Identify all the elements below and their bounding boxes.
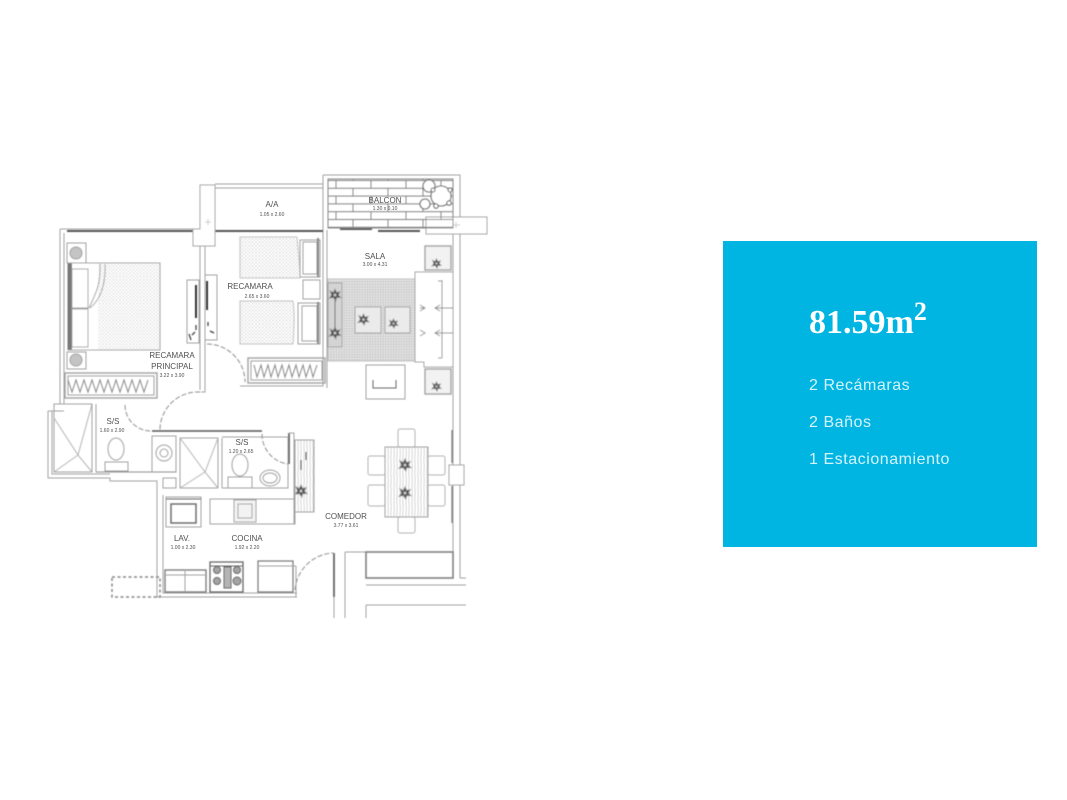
- toilet: [105, 438, 128, 471]
- label: balcon: 1.30 x 0.10: [373, 206, 398, 212]
- shower: [54, 404, 96, 472]
- laundry cabinets: [165, 570, 206, 592]
- stove: [210, 562, 243, 592]
- icon: potted plants: [420, 180, 452, 209]
- label: recamara: RECAMARA: [227, 282, 273, 291]
- structural columns: [193, 185, 487, 485]
- label: balcon: [369, 196, 402, 212]
- night table: [303, 280, 320, 299]
- kitchen and laundry: [112, 497, 296, 597]
- vent: [112, 577, 160, 597]
- label: sala: SALA: [365, 252, 386, 261]
- dark window walls: [67, 229, 452, 597]
- label: cocina: 1.92 x 2.20: [235, 545, 260, 551]
- label: s/s left: S/S: [107, 417, 119, 426]
- label: recamara principal: 3.22 x 3.90: [160, 373, 185, 379]
- balcony: [328, 179, 453, 228]
- master bedroom furniture: [65, 243, 217, 398]
- label: recamara: 2.65 x 3.60: [245, 294, 270, 300]
- label: lav: [171, 534, 196, 551]
- washer: [166, 497, 201, 527]
- door swings: [125, 344, 333, 590]
- label: comedor: [325, 512, 367, 529]
- closet with hangers: [65, 373, 157, 398]
- label: recamara principal: [149, 351, 195, 379]
- label: s/s right: 1.20 x 2.65: [229, 449, 254, 455]
- label: sala: [363, 252, 388, 268]
- label: cocina: [231, 534, 263, 551]
- counter with sink: [210, 499, 295, 524]
- label: s/s left: [100, 417, 125, 434]
- second bedroom furniture: [240, 237, 325, 383]
- wall tv units: [187, 275, 217, 343]
- left bathroom: [54, 404, 176, 488]
- closet with hangers: [248, 358, 325, 383]
- label: comedor: 3.77 x 3.61: [334, 523, 359, 529]
- text: parking: 1 Estacionamiento: [809, 451, 950, 468]
- heading: area: 81.59m2: [809, 297, 927, 341]
- console with plants: [328, 283, 342, 347]
- label: cocina: COCINA: [231, 534, 263, 543]
- coffee tables: [355, 307, 410, 333]
- label: A/A: 1.05 x 2.60: [260, 212, 285, 218]
- chairs: [368, 429, 445, 533]
- table: [385, 447, 428, 517]
- planter: [366, 552, 453, 578]
- label: recamara principal: PRINCIPAL: [151, 362, 193, 371]
- double bed: [68, 263, 160, 350]
- washbasin: [152, 436, 176, 472]
- shower: [180, 438, 222, 488]
- room labels: [100, 196, 402, 551]
- fridge: [258, 561, 296, 597]
- label: A/A: [260, 200, 285, 218]
- label: s/s right: [229, 438, 254, 455]
- icon: table plants: [399, 459, 411, 499]
- label: sala: 3.00 x 4.31: [363, 262, 388, 268]
- label: recamara: [227, 282, 273, 300]
- label: comedor: COMEDOR: [325, 512, 367, 521]
- label: lav: LAV.: [174, 534, 190, 543]
- bed two: [240, 301, 320, 344]
- label: s/s left: 1.60 x 2.90: [100, 428, 125, 434]
- text: bathrooms: 2 Baños: [809, 414, 872, 431]
- side tables: [425, 246, 451, 394]
- rug: [328, 279, 415, 361]
- sofa: [415, 272, 453, 367]
- living room furniture: [328, 246, 453, 399]
- label: recamara principal: RECAMARA: [149, 351, 195, 360]
- wood sideboard: [289, 433, 314, 524]
- label: s/s right: S/S: [236, 438, 248, 447]
- text: bedrooms: 2 Recámaras: [809, 377, 910, 394]
- armchair: [366, 365, 405, 399]
- washbasin counter: [222, 437, 288, 488]
- bed one: [240, 237, 320, 278]
- dining table with chairs: [368, 429, 445, 533]
- label: lav: 1.00 x 2.30: [171, 545, 196, 551]
- label: A/A: A/A: [266, 200, 279, 209]
- exterior walls: [48, 175, 466, 618]
- toilet: [228, 454, 252, 488]
- right bathroom: [180, 437, 288, 488]
- label: balcon: BALCON: [369, 196, 402, 205]
- night tables: [67, 243, 86, 369]
- panel: unit summary: [723, 241, 1037, 547]
